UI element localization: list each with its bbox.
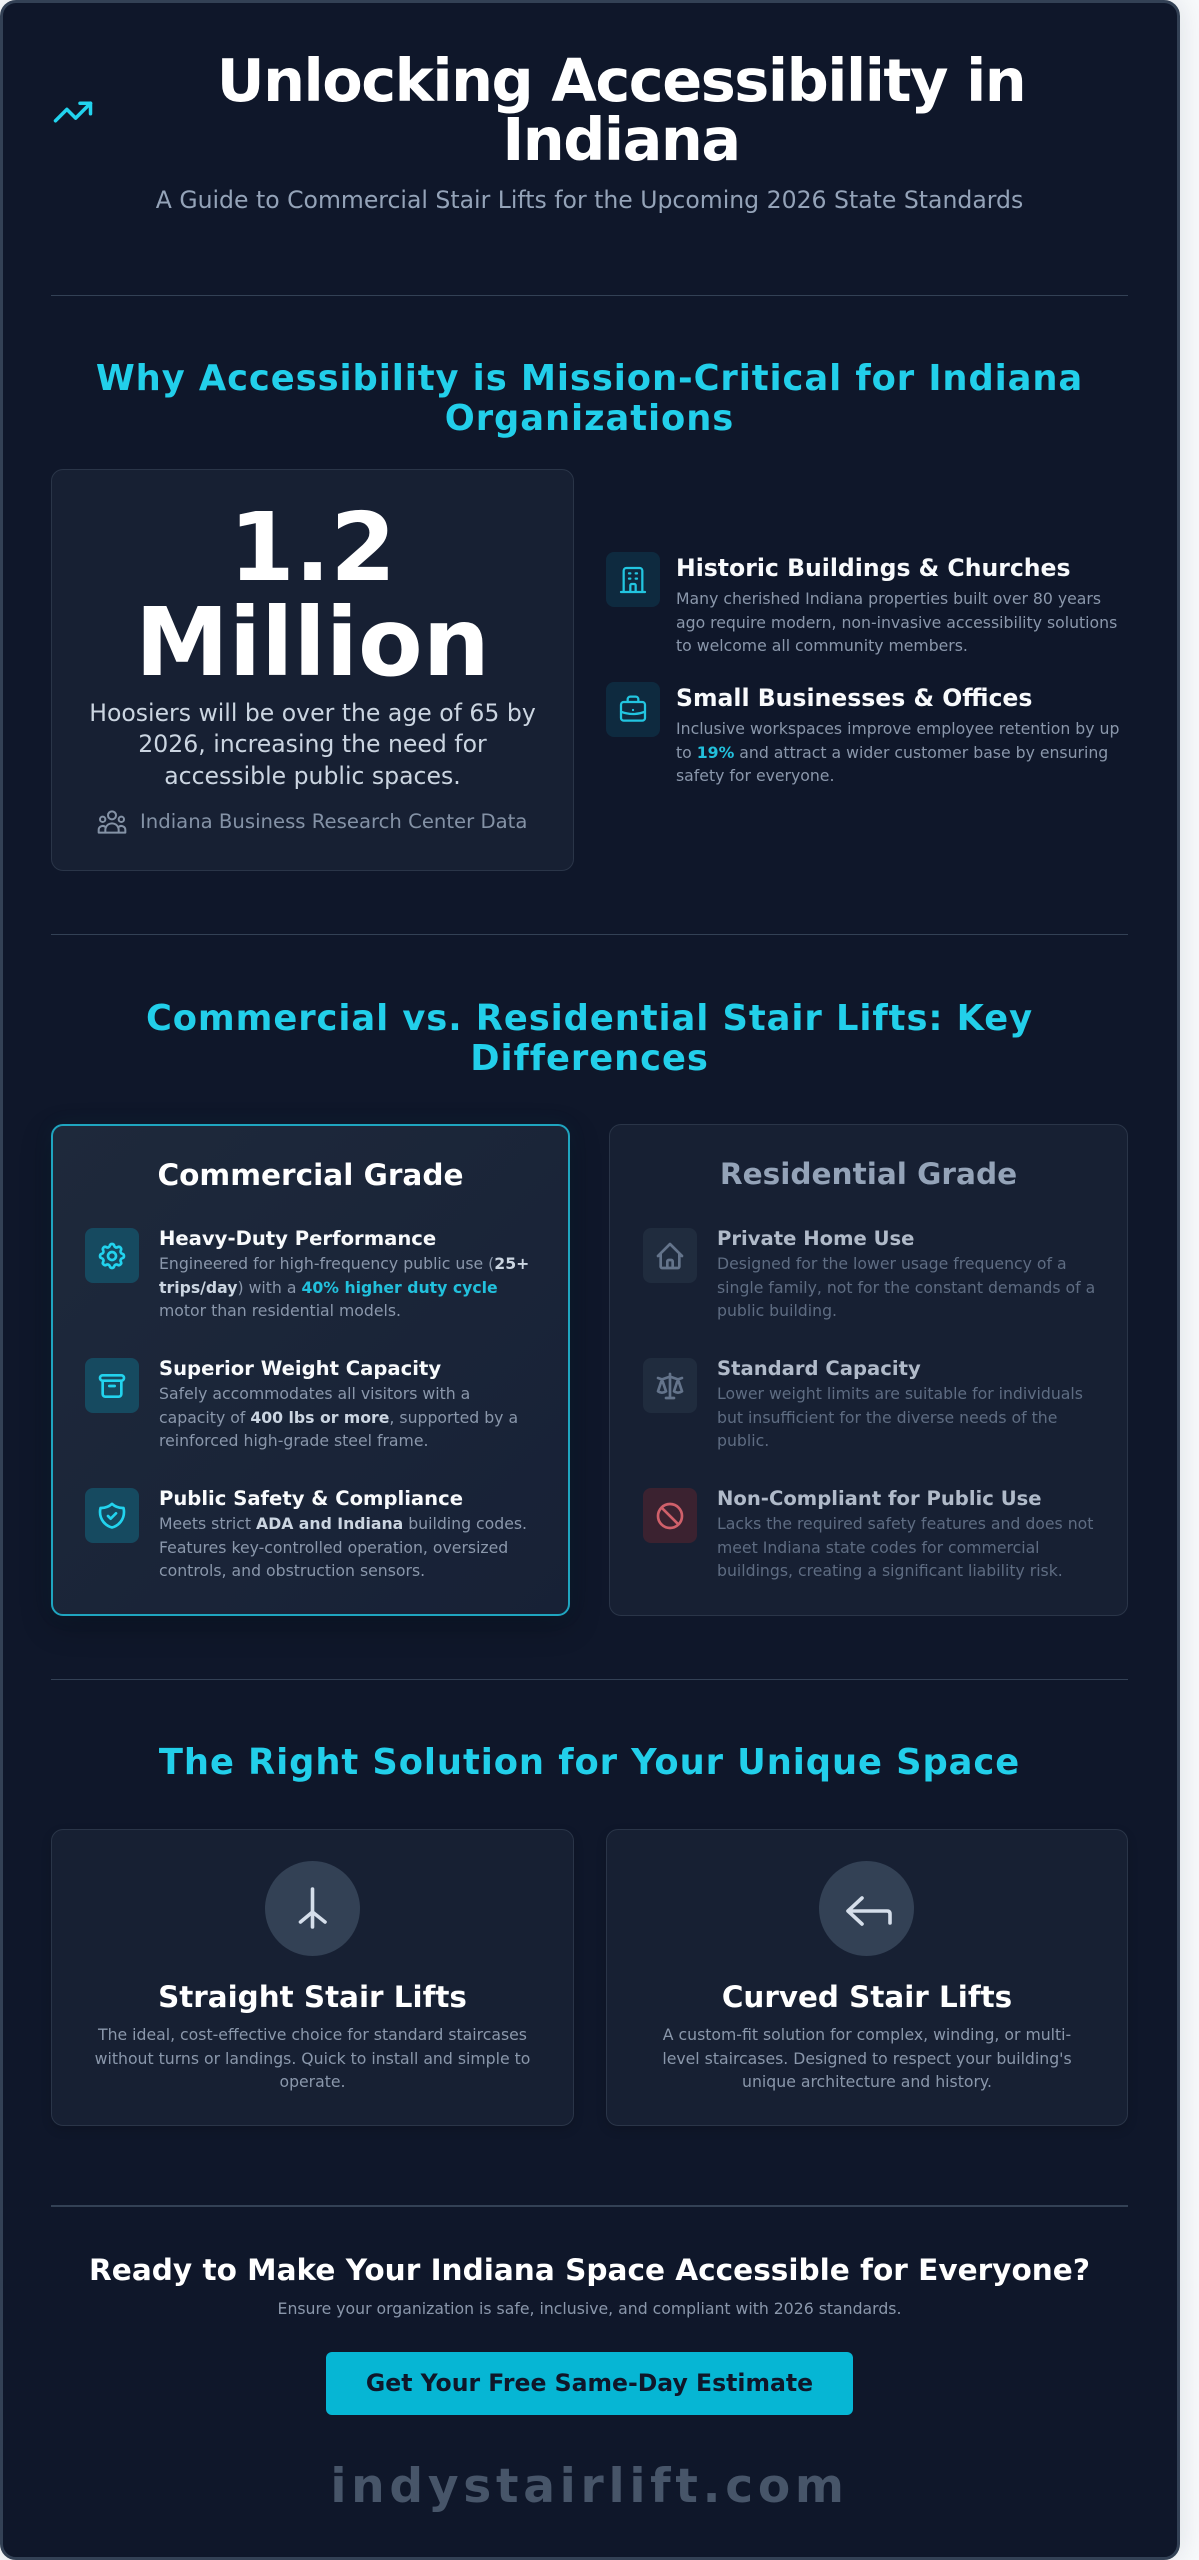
description: to welcome all community members.	[676, 636, 968, 655]
feature description: reinforced high-grade steel frame.	[159, 1431, 428, 1450]
heading: Commercial Grade	[157, 1158, 464, 1192]
heading: why accessibility: Organizations	[445, 398, 734, 439]
statistic description: Hoosiers will be over the age of 65 by	[89, 699, 536, 727]
feature description: motor than residential models.	[159, 1301, 401, 1320]
feature: public safety	[85, 1487, 527, 1580]
icon: archive box	[85, 1358, 139, 1413]
feature description: buildings, creating a significant liability risk.	[717, 1561, 1063, 1580]
source	[98, 810, 527, 834]
title: Unlocking Accessibility in	[217, 46, 1025, 115]
big number: Million	[135, 589, 490, 698]
feature description: Lower weight limits are suitable for individuals	[717, 1384, 1083, 1403]
feature description: trips/day) with a 40% higher duty cycle	[159, 1278, 498, 1296]
feature description: single family, not for the constant demands of a	[717, 1278, 1095, 1296]
description: to 19% and attract a wider customer base by ensuring	[676, 742, 1108, 762]
icon: house	[643, 1228, 697, 1283]
icon: shield check	[85, 1488, 139, 1543]
title	[217, 46, 1025, 174]
item: small businesses	[606, 682, 1119, 785]
feature description: Meets strict ADA and Indiana building codes.	[159, 1514, 527, 1533]
source text: Indiana Business Research Center Data	[140, 810, 527, 833]
big number: 1.2	[229, 494, 396, 603]
button: Get Your Free Same-Day Estimate	[366, 2369, 813, 2397]
heading: commercial vs residential: Differences	[470, 1038, 709, 1079]
icon: briefcase	[606, 682, 660, 737]
panel: 1.2 million statistic	[51, 469, 574, 871]
card text: The ideal, cost-effective choice for standard staircases	[98, 2025, 527, 2044]
icon: curved lift	[819, 1861, 914, 1956]
description: Many cherished Indiana properties built over 80 years	[676, 589, 1101, 608]
feature description: Safely accommodates all visitors with a	[159, 1384, 470, 1403]
feature description: public.	[717, 1431, 769, 1450]
heading: why accessibility: Why Accessibility is Mission-Critical for Indiana	[96, 358, 1083, 399]
feature description	[159, 1384, 518, 1450]
feature: standard capacity	[643, 1357, 1083, 1450]
icon: scales	[643, 1358, 697, 1413]
call to action heading: Ready to Make Your Indiana Space Accessible for Everyone?	[89, 2253, 1090, 2287]
big number	[135, 494, 490, 698]
feature title: Superior Weight Capacity	[159, 1357, 441, 1380]
feature description	[717, 1254, 1095, 1320]
card text	[95, 2025, 530, 2091]
description: Inclusive workspaces improve employee retention by up	[676, 719, 1119, 738]
feature description: Lacks the required safety features and does not	[717, 1514, 1093, 1533]
icon: building	[606, 552, 660, 607]
subtitle: A Guide to Commercial Stair Lifts for the Upcoming 2026 State Standards	[156, 186, 1023, 214]
feature title: Private Home Use	[717, 1227, 914, 1250]
card title: Curved Stair Lifts	[722, 1980, 1012, 2014]
title: Indiana	[502, 105, 740, 174]
description	[676, 719, 1119, 785]
item: historic buildings	[606, 552, 1117, 655]
website: indystairlift.com	[330, 2459, 849, 2514]
card title: Straight Stair Lifts	[158, 1980, 467, 2014]
statistic description: accessible public spaces.	[164, 762, 461, 790]
feature: non-compliant	[643, 1487, 1093, 1580]
heading: Historic Buildings & Churches	[676, 554, 1071, 582]
heading: why accessibility	[96, 358, 1083, 439]
card text: without turns or landings. Quick to install and simple to	[95, 2048, 530, 2068]
card text	[662, 2025, 1072, 2091]
feature description: Designed for the lower usage frequency of a	[717, 1254, 1067, 1273]
feature: weight capacity	[85, 1357, 518, 1450]
card text: A custom-fit solution for complex, winding, or multi-	[663, 2025, 1071, 2044]
heading: Residential Grade	[720, 1157, 1017, 1191]
description	[676, 589, 1117, 655]
panel: straight stair lifts	[51, 1829, 574, 2126]
call to action subtext: Ensure your organization is safe, inclusive, and compliant with 2026 standards.	[278, 2299, 901, 2318]
icon: gear	[85, 1228, 139, 1283]
feature description: but insufficient for the diverse needs of the	[717, 1408, 1057, 1426]
feature description	[159, 1514, 527, 1580]
icon: ban	[643, 1488, 697, 1543]
card text: unique architecture and history.	[742, 2072, 992, 2091]
feature title: Heavy-Duty Performance	[159, 1227, 436, 1250]
icon: trending up arrow	[54, 101, 92, 123]
feature description: Features key-controlled operation, oversized	[159, 1538, 508, 1556]
panel: residential grade	[609, 1124, 1128, 1616]
feature description: Engineered for high-frequency public use (25+	[159, 1254, 529, 1273]
description: safety for everyone.	[676, 766, 834, 785]
description: ago require modern, non-invasive accessibility solutions	[676, 612, 1117, 632]
icon: straight lift	[265, 1861, 360, 1956]
panel: commercial grade	[51, 1124, 570, 1616]
feature description	[717, 1514, 1093, 1580]
feature: heavy duty	[85, 1227, 529, 1320]
icon: users	[98, 810, 126, 834]
feature description: controls, and obstruction sensors.	[159, 1561, 425, 1580]
heading: commercial vs residential	[146, 998, 1033, 1079]
card text: level staircases. Designed to respect your building's	[662, 2048, 1072, 2068]
feature description: capacity of 400 lbs or more, supported by a	[159, 1408, 518, 1426]
heading: right solution: The Right Solution for Your Unique Space	[159, 1742, 1020, 1783]
heading: Small Businesses & Offices	[676, 684, 1032, 712]
statistic description: 2026, increasing the need for	[138, 730, 487, 758]
feature description: public building.	[717, 1301, 837, 1320]
feature title: Non-Compliant for Public Use	[717, 1487, 1042, 1510]
feature description: meet Indiana state codes for commercial	[717, 1538, 1040, 1556]
button	[326, 2352, 853, 2415]
panel: curved stair lifts	[606, 1829, 1128, 2126]
feature title: Standard Capacity	[717, 1357, 921, 1380]
card text: operate.	[279, 2072, 346, 2091]
feature description	[159, 1254, 529, 1320]
statistic description	[89, 699, 536, 790]
feature description	[717, 1384, 1083, 1450]
feature: private home	[643, 1227, 1095, 1320]
heading: commercial vs residential: Commercial vs. Residential Stair Lifts: Key	[146, 998, 1033, 1039]
feature title: Public Safety & Compliance	[159, 1487, 463, 1510]
